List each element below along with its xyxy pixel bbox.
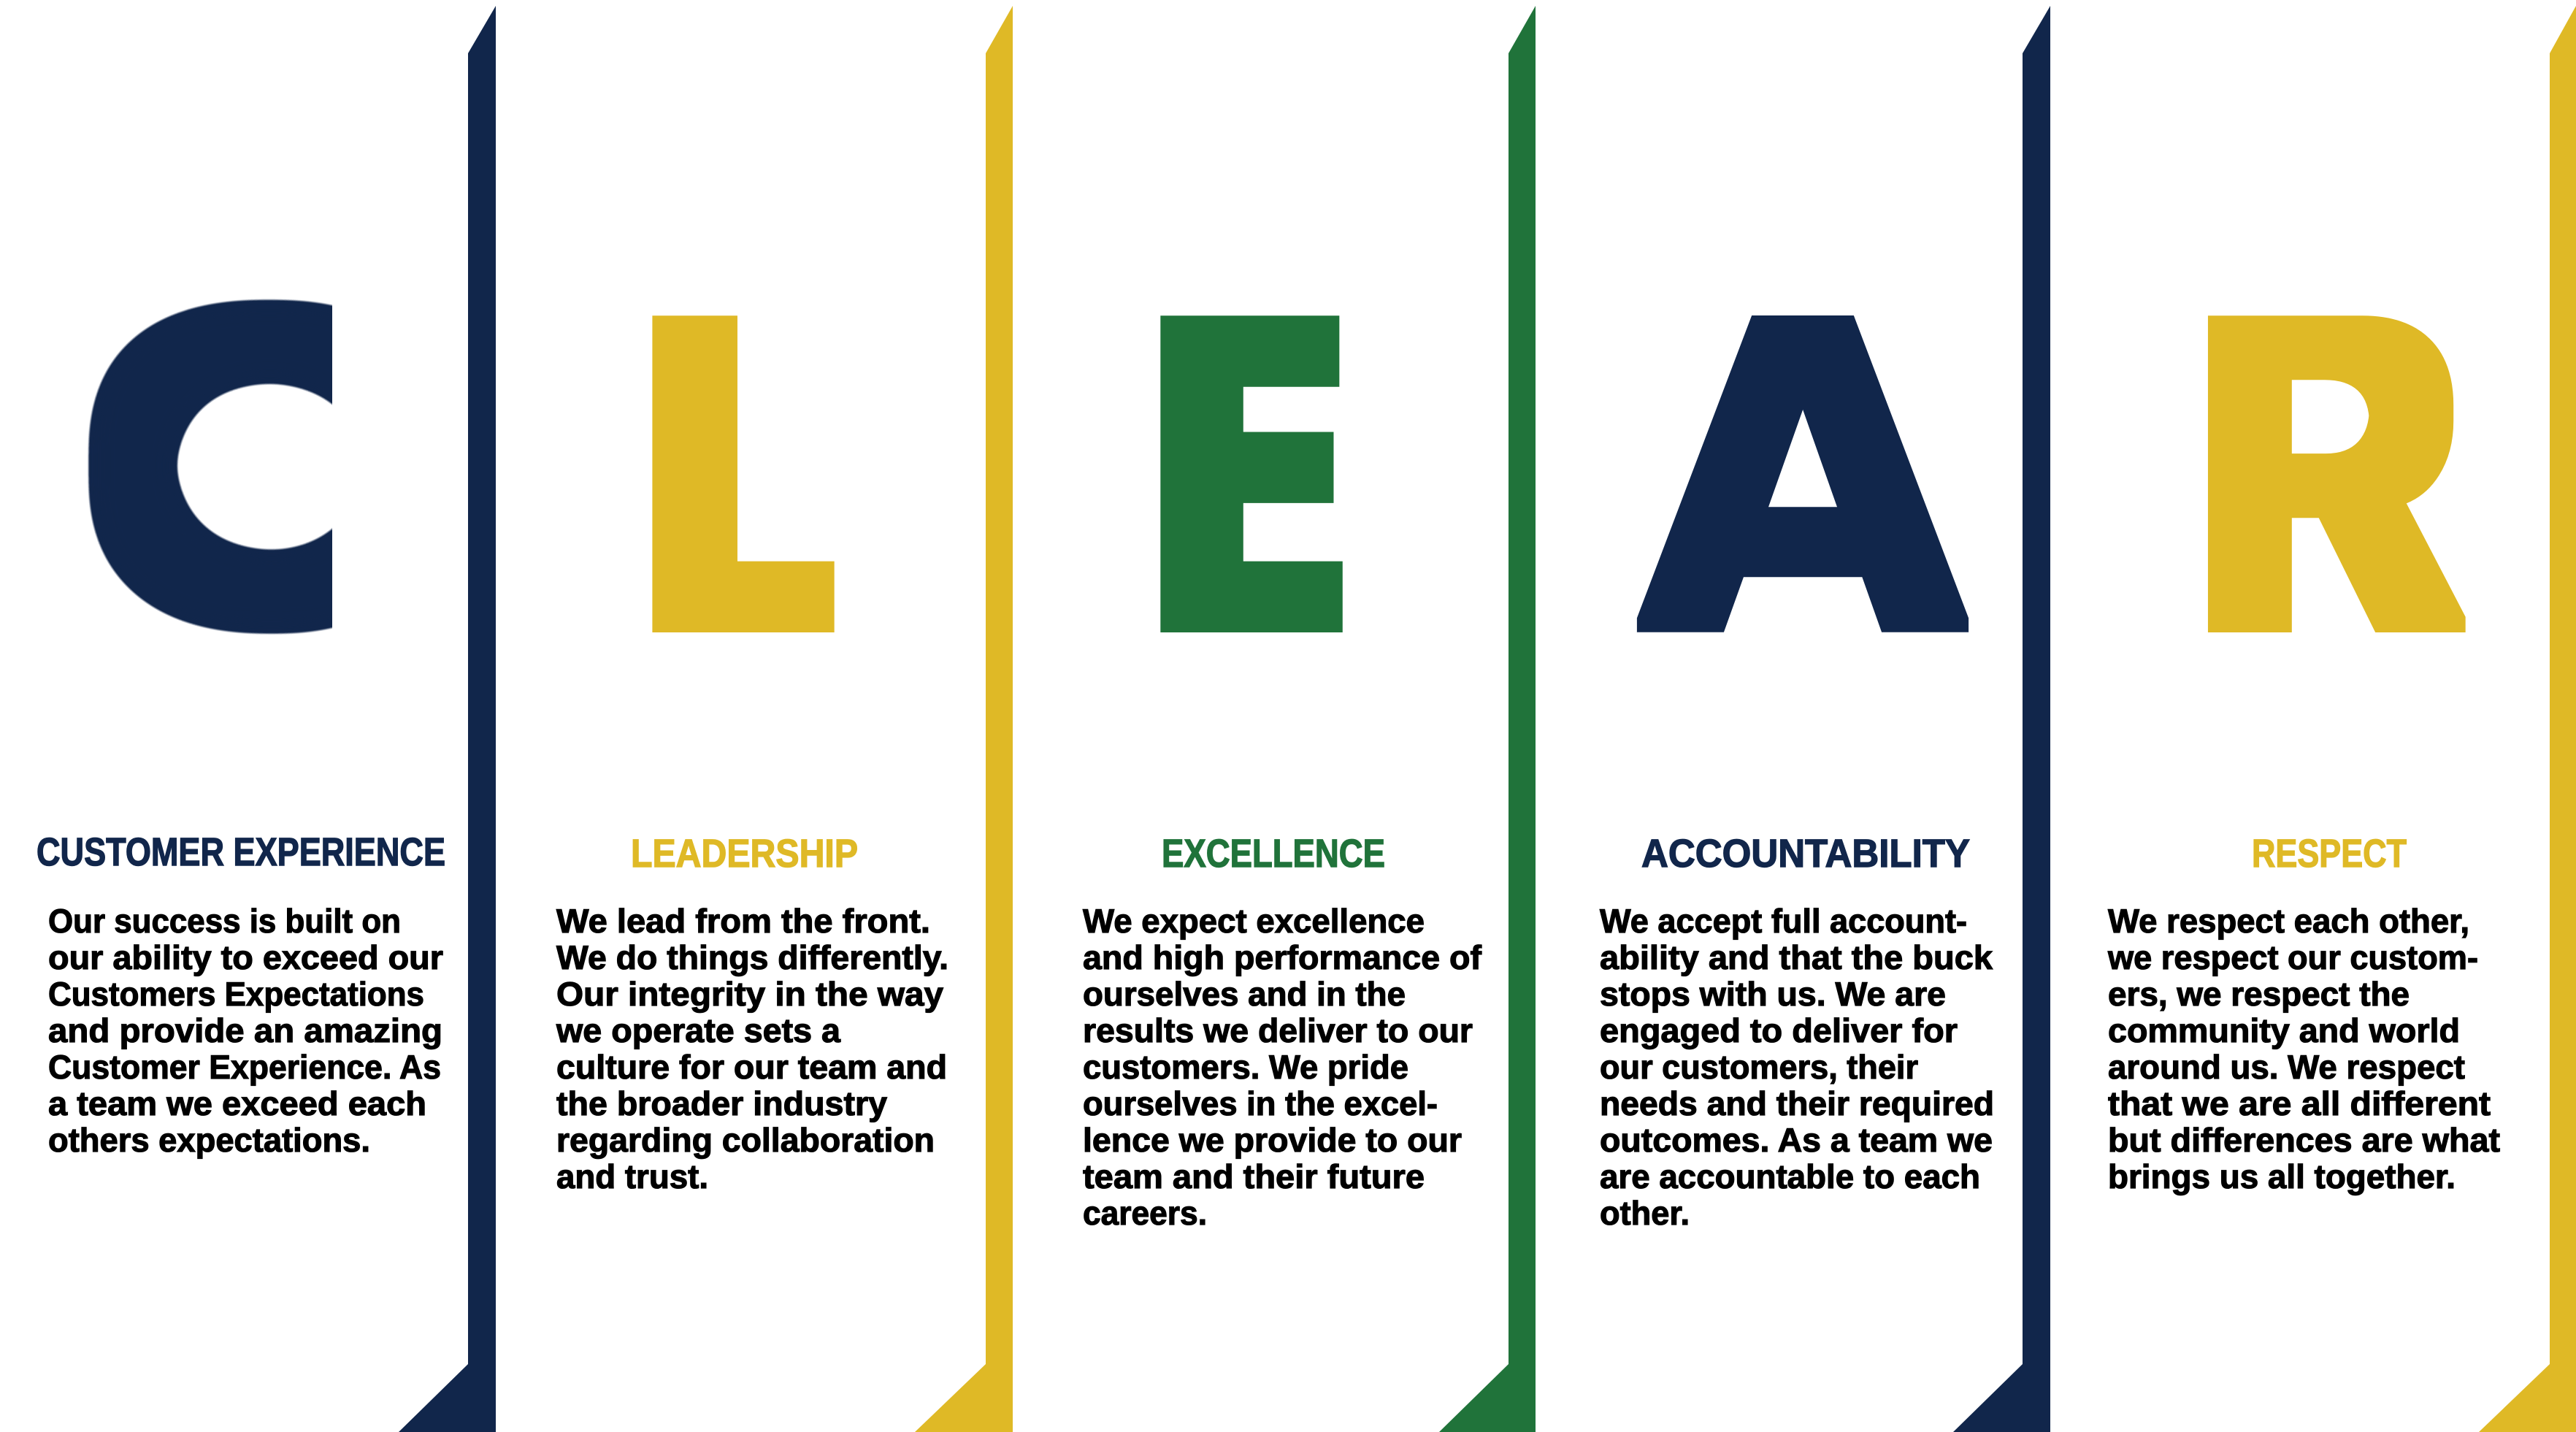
ribbon: gold bbox=[915, 6, 1013, 1432]
body text: accountability: needs and their required bbox=[1600, 1084, 1994, 1122]
big letter C: C bbox=[74, 232, 443, 705]
body text: accountability bbox=[1600, 902, 1994, 1232]
panel: customer experience bbox=[37, 6, 496, 1432]
body text: excellence: careers. bbox=[1083, 1194, 1207, 1232]
heading: excellence: EXCELLENCE bbox=[1162, 832, 1385, 876]
body text: leadership: regarding collaboration bbox=[556, 1121, 935, 1159]
big letter E: E bbox=[1146, 237, 1352, 727]
body text: respect: around us. We respect bbox=[2108, 1048, 2465, 1086]
body text: excellence: customers. We pride bbox=[1083, 1048, 1408, 1086]
body text: leadership bbox=[556, 902, 948, 1195]
body text: respect: but differences are what bbox=[2108, 1121, 2500, 1159]
body text: excellence: and high performance of bbox=[1083, 938, 1482, 976]
ribbon: navy bbox=[1953, 6, 2050, 1432]
body text: leadership: we operate sets a bbox=[556, 1011, 840, 1049]
body text: accountability: We accept full account- bbox=[1600, 902, 1967, 940]
ribbon: green bbox=[1439, 6, 1536, 1432]
panel: excellence bbox=[1083, 6, 1536, 1432]
body text: excellence: lence we provide to our bbox=[1083, 1121, 1462, 1159]
body text: excellence: ourselves and in the bbox=[1083, 975, 1406, 1013]
ribbon: gold bbox=[2479, 6, 2576, 1432]
body text: respect: that we are all different bbox=[2108, 1084, 2491, 1122]
body text: excellence bbox=[1083, 902, 1482, 1232]
body text: respect bbox=[2107, 902, 2500, 1195]
body text: customer experience: Customers Expectations bbox=[48, 975, 424, 1013]
body text: respect: brings us all together. bbox=[2108, 1157, 2456, 1195]
body text: accountability: are accountable to each bbox=[1600, 1157, 1980, 1195]
body text: excellence: team and their future bbox=[1083, 1157, 1425, 1195]
body text: accountability: other. bbox=[1600, 1194, 1690, 1232]
body text: leadership: We lead from the front. bbox=[556, 902, 930, 940]
body text: customer experience bbox=[48, 902, 443, 1159]
body text: accountability: engaged to deliver for bbox=[1600, 1011, 1958, 1049]
body text: excellence: results we deliver to our bbox=[1083, 1011, 1473, 1049]
panel: accountability bbox=[1600, 6, 2050, 1432]
body text: respect: we respect our custom- bbox=[2107, 938, 2478, 976]
body text: leadership: culture for our team and bbox=[556, 1048, 947, 1086]
body text: respect: community and world bbox=[2108, 1011, 2460, 1049]
panel: respect bbox=[2107, 6, 2576, 1432]
big letter A: A bbox=[1638, 239, 1968, 725]
body text: accountability: outcomes. As a team we bbox=[1600, 1121, 1993, 1159]
heading: leadership: LEADERSHIP bbox=[631, 832, 858, 876]
body text: excellence: ourselves in the excel- bbox=[1083, 1084, 1438, 1122]
body text: leadership: We do things differently. bbox=[556, 938, 948, 976]
body text: customer experience: and provide an amazing bbox=[48, 1011, 442, 1049]
heading: customer experience: CUSTOMER EXPERIENCE bbox=[37, 830, 445, 874]
body text: leadership: and trust. bbox=[556, 1157, 708, 1195]
heading: respect: RESPECT bbox=[2252, 832, 2407, 876]
body text: accountability: stops with us. We are bbox=[1600, 975, 1946, 1013]
body text: customer experience: a team we exceed each bbox=[48, 1084, 426, 1122]
big letter L: L bbox=[640, 237, 827, 727]
body text: customer experience: our ability to exceed our bbox=[48, 938, 443, 976]
body text: customer experience: Customer Experience. As bbox=[48, 1048, 441, 1086]
panel: leadership bbox=[556, 6, 1013, 1432]
body text: accountability: ability and that the buck bbox=[1600, 938, 1993, 976]
body text: leadership: Our integrity in the way bbox=[556, 975, 943, 1013]
ribbon: navy bbox=[399, 6, 496, 1432]
big letter R: R bbox=[2201, 231, 2456, 721]
body text: customer experience: Our success is built on bbox=[48, 902, 401, 940]
body text: respect: We respect each other, bbox=[2108, 902, 2469, 940]
body text: leadership: the broader industry bbox=[556, 1084, 887, 1122]
body text: excellence: We expect excellence bbox=[1083, 902, 1425, 940]
body text: accountability: our customers, their bbox=[1600, 1048, 1918, 1086]
body text: customer experience: others expectations. bbox=[48, 1121, 370, 1159]
heading: accountability: ACCOUNTABILITY bbox=[1641, 832, 1970, 876]
body text: respect: ers, we respect the bbox=[2108, 975, 2410, 1013]
